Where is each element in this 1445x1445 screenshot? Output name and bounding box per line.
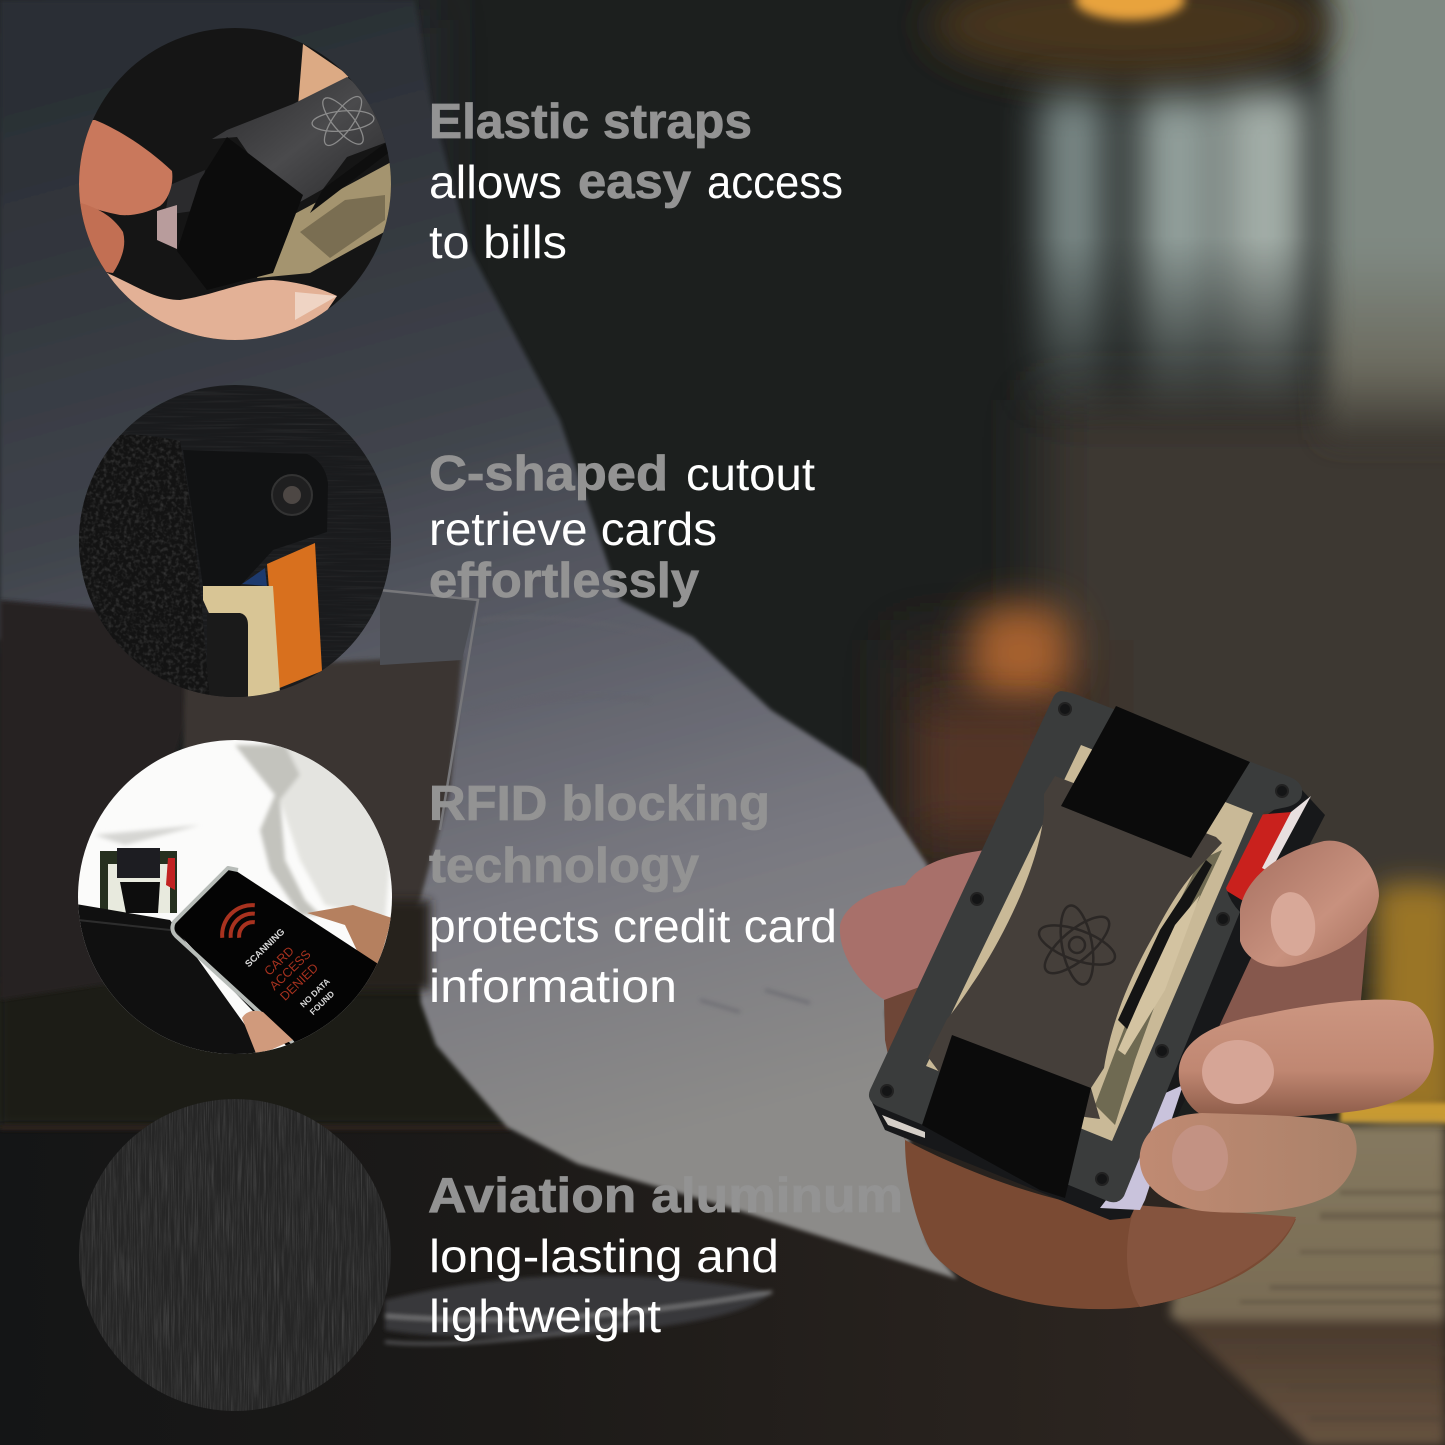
elastic strap xyxy=(177,137,303,290)
thumb xyxy=(840,850,1000,1000)
left finger upper xyxy=(70,120,172,215)
hand holding wallet xyxy=(840,691,1434,1309)
text block: C-shaped cutout: cutout xyxy=(686,448,815,500)
small wallet in pocket xyxy=(100,848,177,913)
glass upper xyxy=(380,592,476,665)
orange blurred blob xyxy=(970,605,1070,700)
banknote shadow strip xyxy=(1095,850,1222,1125)
bottom fingers xyxy=(242,1011,293,1056)
phone text: card: CARD xyxy=(262,944,297,978)
text block: RFID blocking xyxy=(429,777,837,1012)
text block: elastic straps: easy xyxy=(578,155,691,209)
right hand xyxy=(307,905,392,970)
shirt fold lines xyxy=(470,618,810,1012)
circle: aviation aluminum texture xyxy=(78,1098,392,1412)
text block: aviation aluminum xyxy=(428,1169,903,1342)
text block: RFID blocking: protects credit card xyxy=(429,900,837,952)
text block: C-shaped cutout: C-shaped xyxy=(429,447,668,501)
table edge line xyxy=(0,1125,510,1130)
forearm in shadow xyxy=(0,600,190,1000)
frame screws xyxy=(881,703,1288,1185)
text block: elastic straps: allows xyxy=(429,156,562,208)
text block: elastic straps xyxy=(429,95,843,268)
circle: C-shaped cutout photo xyxy=(78,385,392,700)
table xyxy=(0,1130,1445,1445)
wallet xyxy=(869,691,1325,1220)
wallet body edge xyxy=(165,170,205,215)
window light xyxy=(1040,90,1308,425)
darkness under glass xyxy=(140,900,430,990)
white card edge xyxy=(1262,796,1311,872)
card stack xyxy=(157,205,177,249)
yellow strip at table edge xyxy=(1340,1103,1445,1123)
index fingernail xyxy=(1267,889,1319,959)
text block: C-shaped cutout xyxy=(429,447,815,608)
lower elastic band xyxy=(922,1035,1091,1198)
metal clip xyxy=(212,77,386,202)
upper elastic band xyxy=(1061,706,1250,858)
dark strap by clip xyxy=(310,142,392,213)
little finger xyxy=(1127,1205,1296,1307)
thumb base xyxy=(884,985,925,1140)
portrait on banknote xyxy=(1118,895,1200,1055)
wood grain table right xyxy=(1170,1125,1445,1445)
thumb nail xyxy=(295,292,337,320)
text block: elastic straps: to bills xyxy=(429,216,567,268)
text block: aviation aluminum: Aviation aluminum xyxy=(428,1169,903,1223)
blurred room backdrop xyxy=(0,0,1445,940)
right panel glow xyxy=(1325,0,1445,440)
orange card xyxy=(267,543,322,689)
dark gap left of plate xyxy=(985,830,1060,990)
text block: elastic straps: Elastic straps xyxy=(429,95,752,149)
hex screw xyxy=(272,475,312,515)
money clip plate xyxy=(928,776,1222,1119)
lamp shade ring xyxy=(930,0,1330,80)
bottom thumb xyxy=(106,272,337,340)
text block: C-shaped cutout: retrieve cards xyxy=(429,503,717,555)
left finger lower xyxy=(80,202,124,273)
text block: aviation aluminum: long-lasting and xyxy=(429,1230,779,1282)
money xyxy=(257,160,395,278)
card stack bottom xyxy=(1100,1085,1183,1210)
palm xyxy=(905,1140,1296,1309)
pocket seam xyxy=(78,920,170,930)
glass rim xyxy=(380,590,478,830)
shirt folds xyxy=(95,745,395,920)
glass on table xyxy=(180,655,462,935)
orange glow lower xyxy=(920,710,1060,830)
text block: C-shaped cutout: effortlessly xyxy=(429,554,699,608)
wallet back edge xyxy=(869,790,1325,1220)
middle finger xyxy=(1179,1000,1434,1118)
blue card xyxy=(242,568,267,586)
text block: RFID blocking: RFID blocking xyxy=(429,777,770,831)
dark area under arm xyxy=(0,980,520,1125)
text block: RFID blocking: information xyxy=(429,960,677,1012)
banknote xyxy=(926,745,1253,1141)
yellow chair right xyxy=(1370,882,1445,1125)
back of hand xyxy=(1170,900,1370,1080)
velcro strap xyxy=(78,430,213,700)
black pocket xyxy=(78,904,264,1054)
elastic under clip right xyxy=(1118,860,1212,1030)
aluminum frame xyxy=(869,691,1302,1202)
circle: RFID blocking photo xyxy=(70,740,395,1060)
phone text: scanning: SCANNING xyxy=(243,927,287,970)
text block: RFID blocking: technology xyxy=(429,839,699,893)
phone text: no data: NO DATA xyxy=(298,976,332,1009)
text block: elastic straps: access xyxy=(707,156,843,208)
circle: elastic straps photo xyxy=(70,28,395,350)
ring fingernail xyxy=(1172,1125,1228,1191)
wood stripes xyxy=(1240,1190,1445,1422)
brushed metal grain xyxy=(78,1098,392,1412)
ring finger xyxy=(1140,1113,1357,1213)
brushed plate texture xyxy=(132,392,389,640)
shirt sleeve xyxy=(0,0,957,1279)
portrait shading xyxy=(300,195,385,258)
middle fingernail xyxy=(1202,1040,1274,1104)
ceiling lamp glow xyxy=(1075,0,1185,20)
wallet plate xyxy=(183,450,328,586)
index finger xyxy=(1240,841,1379,967)
fingertip top right xyxy=(298,44,350,106)
phone text: denied: DENIED xyxy=(277,961,321,1004)
text block: aviation aluminum: lightweight xyxy=(429,1290,661,1342)
card stack left xyxy=(882,1115,925,1138)
plate on table xyxy=(385,1275,772,1344)
atom emblem xyxy=(1034,903,1120,987)
black tab xyxy=(207,613,248,697)
red card xyxy=(1222,812,1292,902)
phone text: access: ACCESS xyxy=(267,947,314,993)
clip atom logo xyxy=(312,96,374,146)
banknote xyxy=(203,586,280,697)
phone xyxy=(170,866,378,1046)
phone text: found: FOUND xyxy=(308,989,336,1017)
wifi icon xyxy=(220,903,255,938)
